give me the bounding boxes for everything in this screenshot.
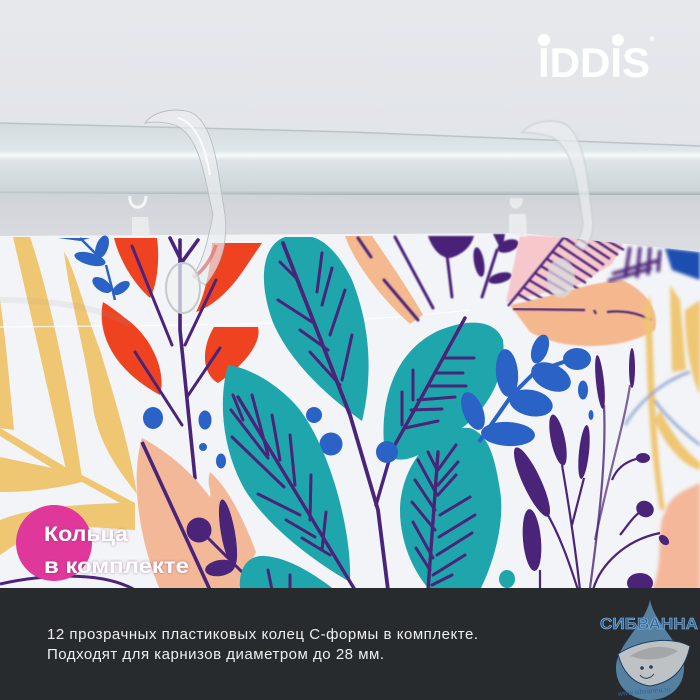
ring hook xyxy=(510,198,526,236)
purple berry stem xyxy=(142,442,242,590)
red leaves xyxy=(102,238,262,395)
ring button xyxy=(547,258,575,298)
purple dash marks xyxy=(513,309,651,320)
yellow palm fronds xyxy=(0,237,137,555)
callout text: Кольца xyxy=(44,523,128,546)
purple red-leaf stem xyxy=(132,238,220,478)
blue leaf sprig right xyxy=(456,332,594,447)
wall background xyxy=(0,0,700,250)
blue dots left xyxy=(143,407,342,468)
pink callout xyxy=(16,505,189,581)
transparent ring right xyxy=(510,121,593,298)
purple tulip top xyxy=(428,236,474,258)
curtain rod xyxy=(0,123,700,195)
teal leaf bottom centre xyxy=(400,428,501,590)
shaded wall below rod xyxy=(0,190,700,255)
ring hook xyxy=(130,196,146,207)
peach leaf bottom left xyxy=(137,438,256,590)
purple hatching xyxy=(508,236,624,314)
pink hatched triangle xyxy=(506,235,625,302)
teal leaf bottom xyxy=(240,556,335,590)
bathtub face xyxy=(640,665,654,678)
purple veins on teal leaves xyxy=(231,243,475,590)
description text: Подходят для карнизов диаметром до 28 мм. xyxy=(47,646,384,663)
IDDIS logo: IDDIS xyxy=(538,39,650,86)
peach leaf top centre xyxy=(345,236,423,324)
blurred yellow leaf far right xyxy=(625,285,700,510)
purple wildflower plants right xyxy=(499,348,671,593)
callout text: в комплекте xyxy=(44,555,189,578)
purple sprig far right xyxy=(608,247,660,281)
teal leaf upper centre xyxy=(264,237,369,421)
peach blob far right xyxy=(652,483,700,590)
transparent ring left xyxy=(130,110,226,313)
teal leaf lower left xyxy=(223,365,350,582)
teal leaf right xyxy=(383,323,504,460)
description text: 12 прозрачных пластиковых колец С-формы в комплекте. xyxy=(47,626,478,643)
ring button xyxy=(166,263,200,313)
blue fabric patch xyxy=(665,248,700,280)
blue sprig top left xyxy=(58,234,132,300)
curtain fabric with floral print xyxy=(0,230,700,593)
watermark url: www.sibvanna.ru xyxy=(617,686,671,698)
watermark title: СИБВАННА xyxy=(600,616,698,633)
rod top edge xyxy=(0,123,700,146)
faint stripe on stitched hem xyxy=(0,310,470,327)
bathtub icon xyxy=(618,640,690,686)
watermark: Sibvanna logo xyxy=(600,600,698,700)
dark footer band xyxy=(0,588,700,700)
purple curve bottom left xyxy=(0,576,135,590)
purple marks top centre xyxy=(358,237,497,320)
blue blob node xyxy=(376,441,398,463)
peach leaf right xyxy=(510,280,656,346)
hem stitch shadow xyxy=(0,300,130,325)
purple leaves top right xyxy=(471,234,520,286)
